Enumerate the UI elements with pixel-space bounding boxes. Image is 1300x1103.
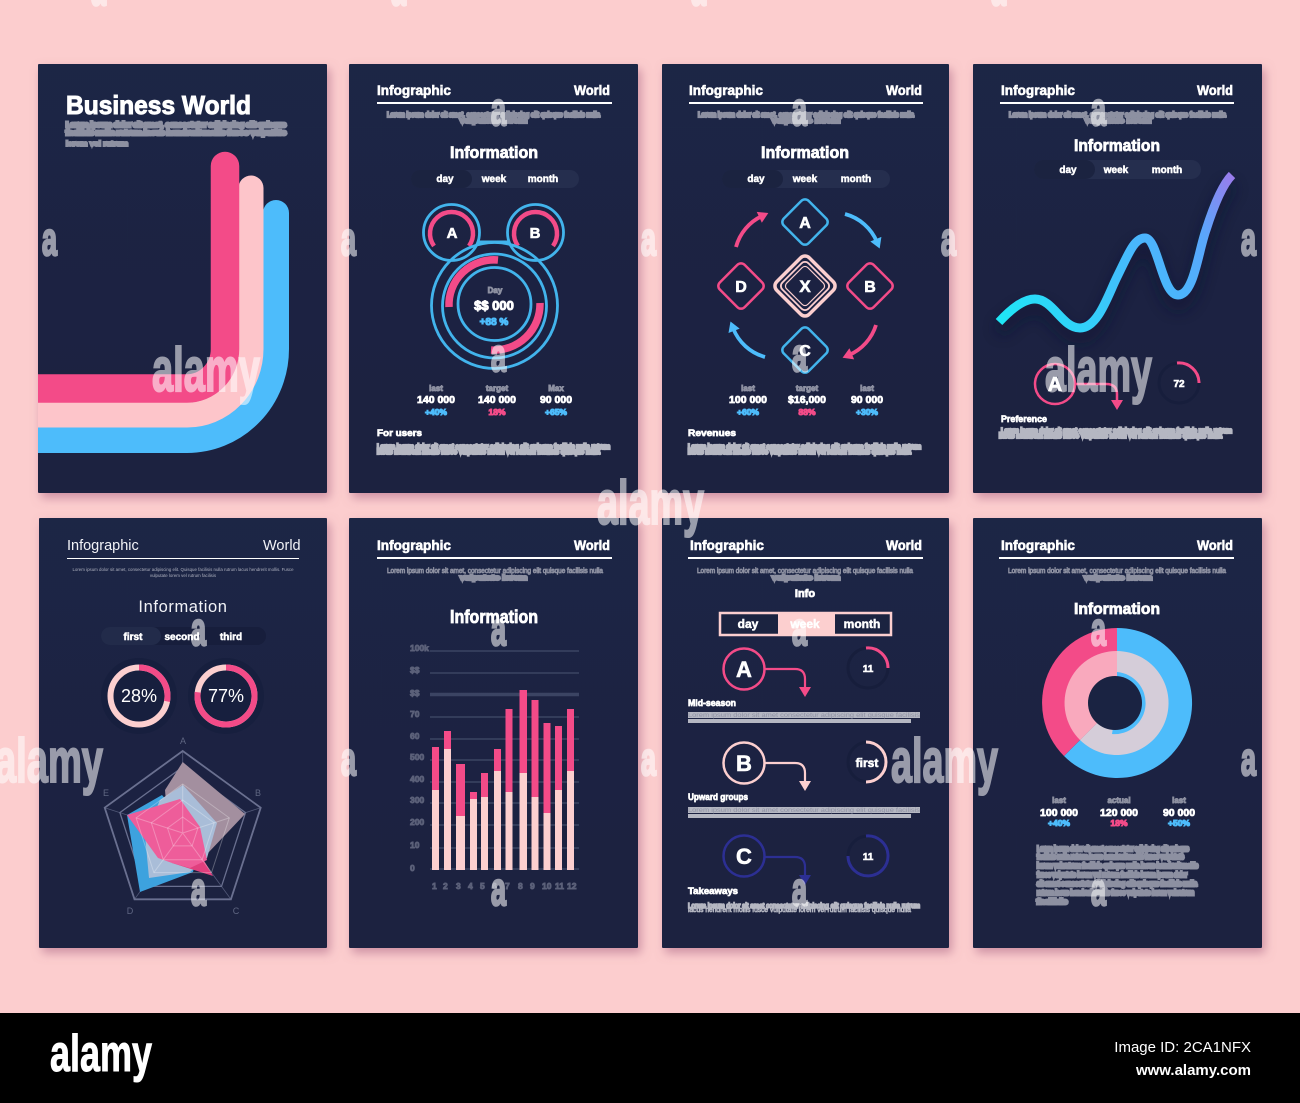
header (67, 538, 301, 578)
donut 28%: 28% (121, 686, 157, 706)
radar inner grid (136, 784, 229, 873)
header (377, 537, 612, 582)
y axis labels: $$ (410, 688, 420, 698)
tabs: month (528, 174, 558, 185)
panel: stacked bar chart (349, 518, 638, 948)
card (349, 518, 638, 948)
paragraph: rutrum lacus hendrerit mollis fusce vulputate lorem vel rutrum (1037, 890, 1194, 897)
y axis labels: 300 (410, 795, 424, 805)
tabs: day (747, 174, 765, 185)
header: Infographic (1001, 82, 1075, 98)
y axis labels: 0 (410, 863, 415, 873)
diamond X: X (799, 277, 811, 296)
header: Infographic (377, 537, 451, 553)
card (349, 64, 638, 493)
gridlines (430, 651, 579, 869)
gauge A (424, 204, 480, 260)
header (688, 537, 923, 582)
gauge A: A (447, 225, 458, 242)
donut (1042, 628, 1192, 778)
paragraph: Lorem ipsum dolor sit amet consectetur adipiscing elit quisque (1037, 846, 1189, 853)
diamond C: C (799, 343, 811, 360)
header: World (1197, 82, 1233, 98)
pink ribbon (20, 166, 225, 388)
row B: B (736, 751, 752, 776)
main gauge: Day (488, 286, 503, 295)
tabs: week (1103, 165, 1129, 176)
tabs: day (1059, 165, 1077, 176)
watermarks: a (341, 733, 356, 785)
main gauge: +88 % (480, 317, 508, 328)
row C: Lorem ipsum dolor sit amet consectetur adipiscing elit quisque facilisis nulla rutrum (688, 903, 920, 910)
ring gauge: 72 (1173, 379, 1185, 390)
watermarks: a (1091, 603, 1106, 655)
watermarks: a (491, 329, 506, 381)
header: vulputate lorem (772, 118, 840, 125)
caption (377, 428, 610, 456)
stats: +60% (737, 407, 759, 417)
footer logo: alamy (50, 1025, 152, 1083)
header: Lorem ipsum dolor sit amet, consectetur adipiscing elit quisque facilisis nulla (698, 112, 914, 119)
row A: A (736, 657, 752, 682)
stats: 18% (488, 407, 506, 417)
radar labels: E (103, 788, 109, 798)
caption: Lorem ipsum dolor sit amet consectetur adipiscing elit quisque facilisis nulla rutrum (1001, 428, 1232, 435)
radar fill: pale series (145, 785, 217, 878)
stats: 90 000 (1163, 807, 1195, 819)
heading: Information (1074, 136, 1160, 155)
stats: last (860, 384, 874, 393)
footer bar (0, 1013, 1300, 1103)
stats: actual (1107, 796, 1131, 805)
tabs: third (220, 632, 242, 643)
tabs: week (789, 617, 820, 631)
gauge B: B (530, 225, 541, 242)
watermarks: alamy (597, 469, 704, 538)
watermarks: a (1241, 213, 1256, 265)
row C (688, 836, 920, 914)
tabs: month (841, 174, 871, 185)
radar chart (103, 736, 261, 916)
main gauge (432, 242, 558, 368)
card (662, 518, 949, 948)
header: vulputate lorem vel rutrum facilisis (150, 573, 217, 578)
ribbons (20, 166, 276, 440)
stats: target (796, 384, 818, 393)
radar labels: C (233, 906, 240, 916)
stats: +40% (425, 407, 447, 417)
radar fill: blue series (127, 795, 200, 892)
arrow: pink top-left (736, 216, 762, 247)
blue ribbon (20, 213, 276, 440)
watermarks: a (191, 863, 206, 915)
caption (688, 428, 921, 456)
hole (1088, 676, 1142, 730)
watermarks: a (1091, 83, 1106, 135)
caption: lacus hendrerit mollis fusce vulputate lorem vel rutrum facilisis quisque nulla (999, 433, 1222, 440)
radar fill: pink tip (172, 845, 213, 876)
stats: $16,000 (788, 394, 826, 406)
diamond A: A (799, 215, 811, 232)
donut 28% (101, 658, 177, 734)
stats (1040, 796, 1195, 828)
cover intro text: Lorem ipsum dolor sit amet, consectetur adipiscing elit quisque (66, 122, 286, 129)
row C: Takeaways (688, 886, 738, 896)
bars (432, 690, 574, 816)
middle pale segment (1080, 651, 1169, 755)
paragraph: lorem vel rutrum facilisis quisque nulla lacus hendrerit mollis (1037, 863, 1198, 870)
connector (478, 240, 510, 244)
stats: +65% (545, 407, 567, 417)
row A: Mid-season (688, 698, 736, 708)
header: World (263, 538, 301, 554)
row A: Lorem ipsum dolor sit amet consectetur adipiscing elit quisque facilisis (688, 713, 920, 719)
watermarks: a (641, 733, 656, 785)
row B: first (856, 756, 878, 770)
cover card (38, 64, 327, 493)
stats (729, 384, 883, 417)
y axis labels: 70 (410, 709, 420, 719)
radar labels: D (127, 906, 134, 916)
tabs (1034, 160, 1201, 179)
header: Lorem ipsum dolor sit amet, consectetur adipiscing elit quisque facilisis nulla (1009, 112, 1226, 119)
tabs (722, 170, 890, 188)
header: Infographic (690, 537, 764, 553)
tabs (720, 613, 891, 635)
diamond A (780, 197, 830, 247)
diamond B: B (864, 279, 876, 296)
line curve (999, 175, 1232, 328)
watermarks: alamy (891, 727, 998, 796)
watermarks: a (792, 83, 807, 135)
watermarks: a (792, 863, 807, 915)
panel: info rows (662, 518, 949, 948)
stats: +30% (856, 407, 878, 417)
paragraph: facilisis nulla rutrum lacus hendrerit mollis fusce vulputate (1037, 854, 1184, 861)
caption: lacus hendrerit mollis fusce vulputate lorem vel rutrum facilisis quisque nulla (688, 449, 911, 456)
cover intro text: facilisis nulla rutrum lacus hendrerit mollis fusce vulputate (66, 130, 286, 137)
caption: For users (377, 428, 422, 438)
watermarks: a (491, 603, 506, 655)
x axis labels: 11 (555, 881, 564, 891)
x axis labels: 12 (567, 881, 577, 891)
radar fill: brown series (165, 762, 245, 853)
header: vulputate lorem (1084, 575, 1152, 582)
heading: Information (138, 598, 228, 616)
paragraph (1037, 846, 1198, 906)
tabs: day (738, 617, 759, 631)
inner blue ring (1112, 672, 1146, 734)
tabs: first (124, 632, 143, 643)
cover intro text (66, 122, 286, 148)
header: vulputate lorem (772, 575, 840, 582)
row C: C (736, 844, 752, 869)
stats: last (741, 384, 755, 393)
ring gauge (1159, 363, 1199, 403)
header (377, 82, 612, 125)
outer pink segment (1042, 628, 1117, 756)
tabs: week (481, 174, 507, 185)
row C: lacus hendrerit mollis fusce vulputate lorem vel rutrum facilisis quisque nulla (688, 907, 911, 914)
stats: last (1052, 796, 1066, 805)
light pink ribbon (20, 188, 251, 415)
header: vulputate lorem (460, 575, 527, 582)
watermarks: alamy (0, 727, 103, 796)
watermarks: a (1091, 863, 1106, 915)
donut 77%: 77% (208, 686, 244, 706)
heading: Information (1074, 601, 1160, 618)
tabs: week (792, 174, 818, 185)
watermarks: a (792, 329, 807, 381)
panel: business world cover (20, 64, 327, 493)
header (689, 82, 923, 125)
watermarks: alamy (152, 336, 260, 405)
heading: Information (450, 143, 538, 162)
stats: last (1172, 796, 1186, 805)
y axis labels: 200 (410, 817, 424, 827)
cover title: Business World (66, 90, 251, 120)
y axis labels: $$ (410, 665, 420, 675)
arrow: pink bottom-right (849, 325, 876, 355)
watermarks: a (341, 213, 356, 265)
paragraph: facilisis (1037, 899, 1068, 906)
stats: 90 000 (540, 394, 572, 406)
footer url: www.alamy.com (1135, 1062, 1251, 1079)
card (973, 518, 1262, 948)
arrow: blue bottom-left (733, 328, 765, 357)
y axis labels: 400 (410, 774, 424, 784)
stats: +50% (1168, 818, 1190, 828)
line shadow (999, 185, 1232, 338)
tabs: second (164, 632, 200, 643)
stats: 18% (1110, 818, 1128, 828)
row A: 11 (863, 664, 874, 675)
watermarks: a (191, 603, 206, 655)
radar labels (103, 736, 261, 916)
row C: 11 (863, 852, 874, 863)
watermarks: a (792, 603, 807, 655)
radar labels: B (255, 788, 261, 798)
stats: 100 000 (729, 394, 767, 406)
bars base (432, 749, 574, 870)
stats: target (486, 384, 508, 393)
header: Infographic (377, 82, 451, 98)
callout A: A (1048, 374, 1062, 396)
header: World (886, 82, 922, 98)
caption: lacus hendrerit mollis fusce vulputate lorem vel rutrum facilisis quisque nulla (377, 449, 600, 456)
stats: 120 000 (1100, 807, 1138, 819)
diamond C (780, 325, 830, 375)
header: World (574, 537, 610, 553)
row B: Lorem ipsum dolor sit amet consectetur adipiscing elit quisque facilisis (688, 808, 920, 814)
stats: +40% (1048, 818, 1070, 828)
header: World (886, 537, 922, 553)
outer blue segment (1064, 628, 1192, 778)
diamond X (772, 253, 838, 319)
stats: Max (548, 384, 564, 393)
x axis labels (432, 881, 577, 891)
caption: Lorem ipsum dolor sit amet consectetur adipiscing elit quisque facilisis nulla rutrum (688, 444, 921, 451)
main gauge: $$ 000 (474, 298, 514, 313)
header: Lorem ipsum dolor sit amet, consectetur adipiscing elit. Quisque facilisis nulla rutrum lacus hendrerit mollis. Fusce (72, 567, 294, 572)
panel: process diamonds (662, 64, 949, 493)
header: vulputate lorem (1085, 118, 1151, 125)
radar fill: pink series (127, 799, 207, 868)
header: World (574, 82, 610, 98)
x axis labels: 5 (480, 881, 485, 891)
watermarks: a (1241, 733, 1256, 785)
panel: radar chart (39, 518, 327, 948)
heading: Information (450, 607, 538, 627)
header: Lorem ipsum dolor sit amet, consectetur adipiscing elit quisque facilisis nulla (387, 568, 603, 575)
header (1000, 82, 1234, 125)
watermarks: a (42, 213, 57, 265)
tabs (101, 627, 266, 645)
panel: donut chart (973, 518, 1262, 948)
radar labels: A (180, 736, 186, 746)
watermarks: a (491, 863, 506, 915)
y axis labels (410, 643, 429, 873)
stats: 88% (798, 407, 816, 417)
diamond B (845, 261, 895, 311)
cover intro text: lorem vel rutrum (66, 141, 128, 148)
caption (999, 414, 1232, 440)
paragraph: fusce vulputate lorem vel rutrum facilisis lorem ipsum dolor (1037, 872, 1188, 879)
y axis labels: 10 (410, 840, 420, 850)
x axis labels: 6 (492, 881, 497, 891)
tabs (411, 170, 579, 188)
caption: Lorem ipsum dolor sit amet consectetur adipiscing elit quisque facilisis nulla rutrum (377, 444, 610, 451)
heading: Info (795, 588, 815, 600)
watermarks: a (941, 213, 956, 265)
stats: 140 000 (478, 394, 516, 406)
paragraph: sit amet consectetur adipiscing elit quisque facilisis nulla (1037, 881, 1197, 888)
radar outer grid (105, 751, 261, 899)
header: Infographic (67, 538, 139, 554)
x axis labels: 2 (443, 881, 448, 891)
card (39, 518, 327, 948)
callout A (1035, 364, 1117, 404)
y axis labels: 100k (410, 643, 429, 653)
x axis labels: 9 (530, 881, 535, 891)
row A (688, 648, 920, 723)
watermarks: a (491, 83, 506, 135)
header (999, 537, 1234, 582)
tabs: day (436, 174, 454, 185)
card (662, 64, 949, 493)
stats: 90 000 (851, 394, 883, 406)
x axis labels: 1 (432, 881, 437, 891)
row B: Upward groups (688, 792, 748, 802)
watermarks: alamy (1045, 336, 1152, 405)
heading: Information (761, 143, 849, 162)
x axis labels: 7 (505, 881, 510, 891)
row B (688, 742, 920, 818)
tabs: month (844, 617, 880, 631)
diamond D: D (735, 279, 747, 296)
tabs: month (1152, 165, 1182, 176)
footer image id: Image ID: 2CA1NFX (1114, 1039, 1251, 1056)
watermarks: a (641, 213, 656, 265)
x axis labels: 3 (456, 881, 461, 891)
stats: 140 000 (417, 394, 455, 406)
header: Lorem ipsum dolor sit amet, consectetur adipiscing elit quisque facilisis nulla (697, 568, 913, 575)
stats: last (429, 384, 443, 393)
middle pink segment (1065, 651, 1117, 740)
donut 77% (188, 658, 264, 734)
x axis labels: 4 (468, 881, 473, 891)
arrow: blue top-right (845, 214, 877, 242)
header: Lorem ipsum dolor sit amet, consectetur adipiscing elit quisque facilisis nulla (1008, 568, 1226, 575)
stats: 100 000 (1040, 807, 1078, 819)
x axis labels: 10 (542, 881, 552, 891)
panel: circular gauges (349, 64, 638, 493)
header: vulputate lorem (460, 118, 527, 125)
stats (417, 384, 572, 417)
caption: Preference (1001, 414, 1047, 424)
caption: Revenues (688, 428, 736, 438)
header: World (1197, 537, 1233, 553)
y axis labels: 500 (410, 752, 424, 762)
header: Lorem ipsum dolor sit amet, consectetur adipiscing elit quisque facilisis nulla (387, 112, 600, 119)
panel: line chart (973, 64, 1262, 493)
gauge B (508, 204, 564, 260)
card (973, 64, 1262, 493)
header: Infographic (689, 82, 763, 98)
diamond D (716, 261, 766, 311)
y axis labels: 60 (410, 731, 420, 741)
x axis labels: 8 (518, 881, 523, 891)
header: Infographic (1001, 537, 1075, 553)
